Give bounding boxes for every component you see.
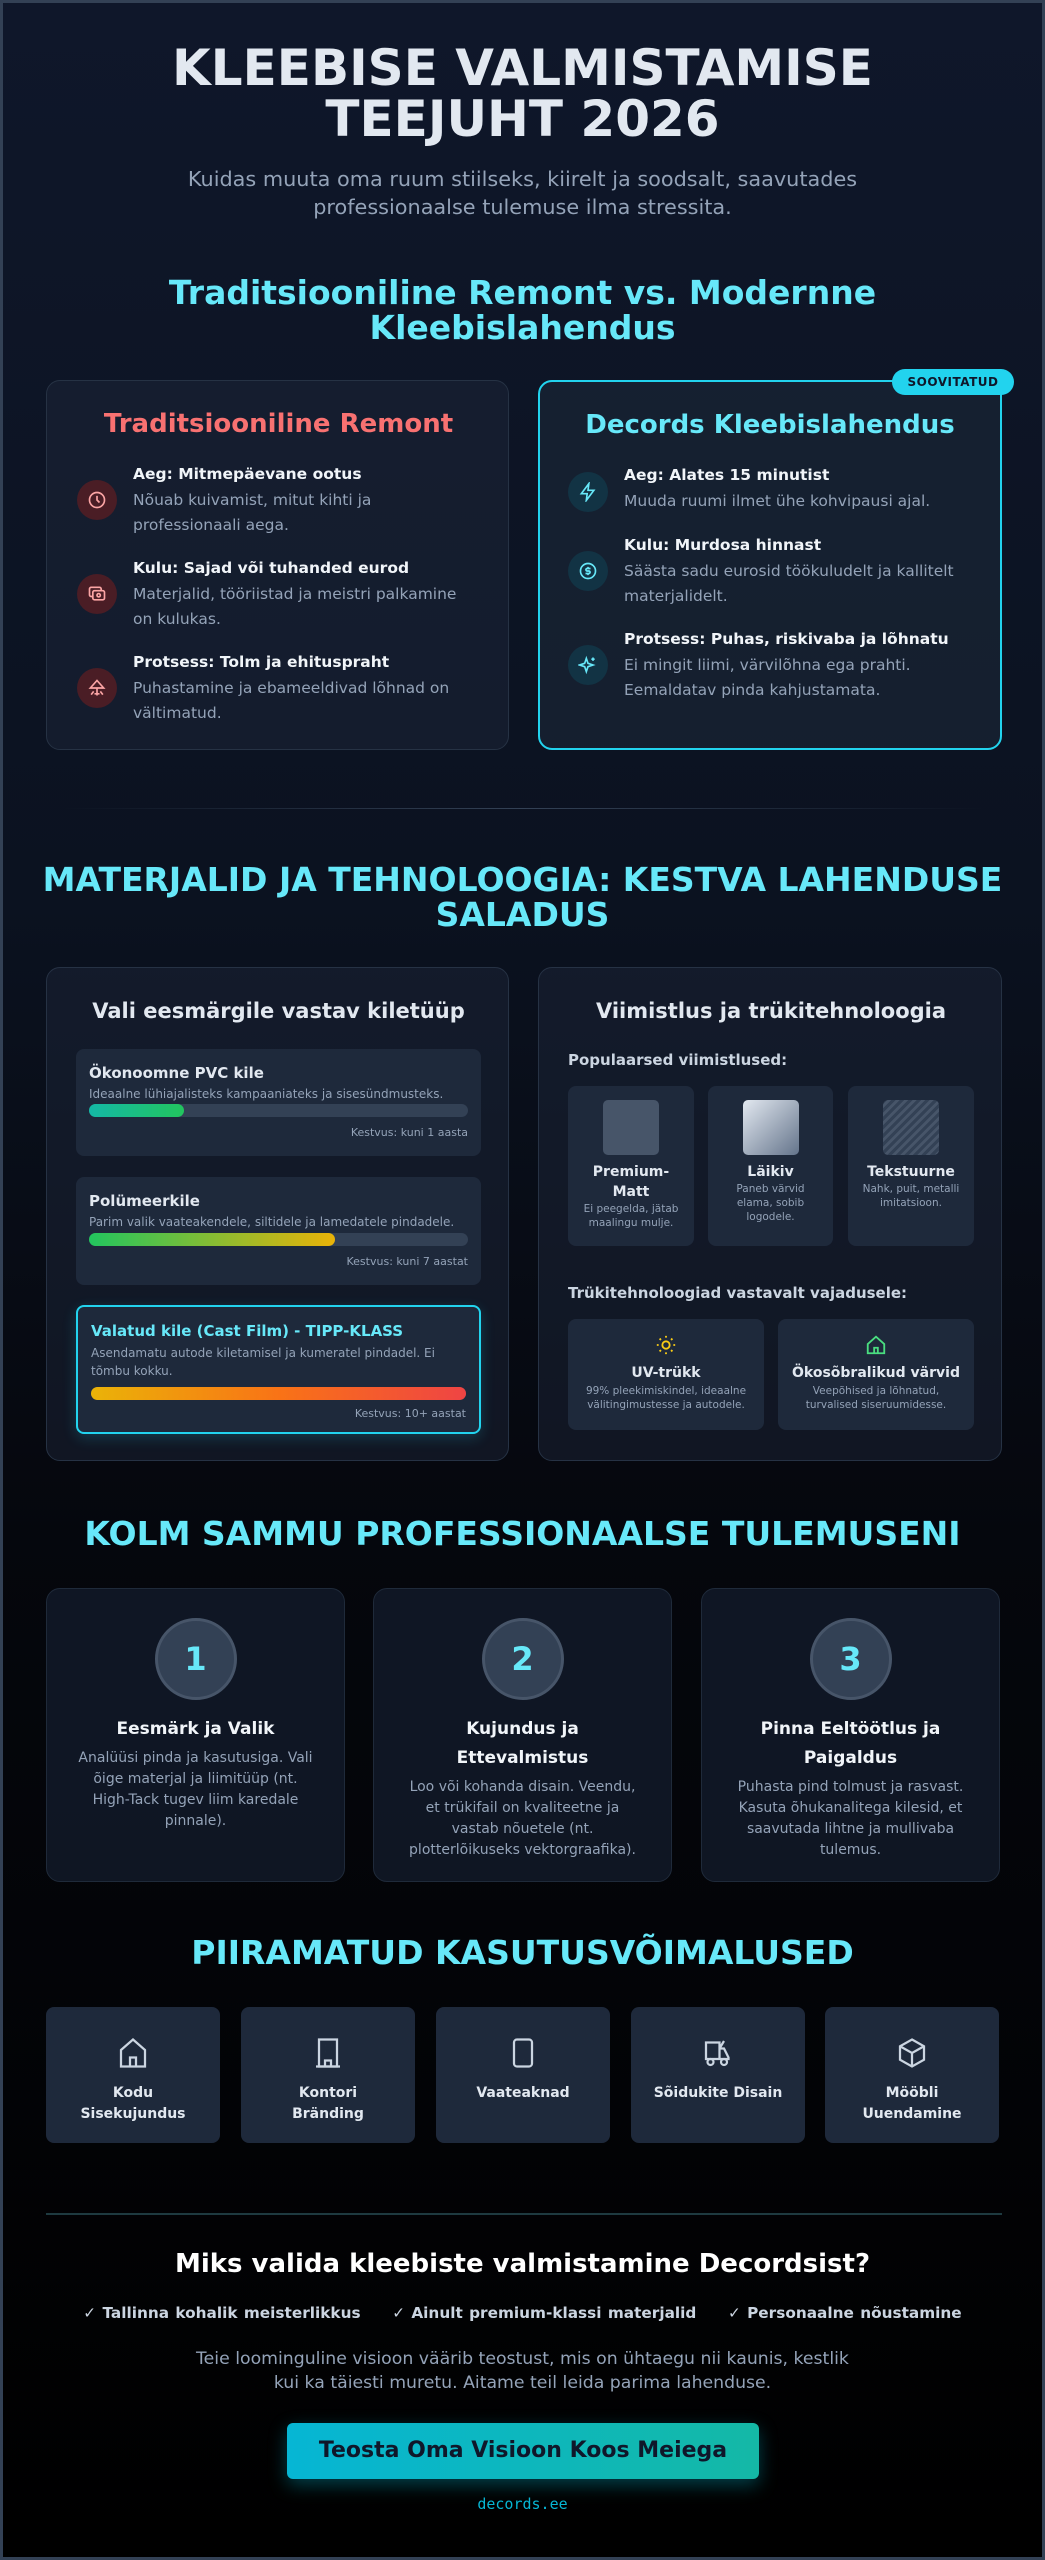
step 2: plotterlõikuseks vektorgraafika). — [409, 1842, 636, 1858]
use: vehicles: Sõidukite Disain — [654, 2085, 782, 2101]
heading: materials: MATERJALID JA TEHNOLOOGIA: KESTVA LAHENDUSE — [43, 860, 1002, 899]
item: process: vältimatud. — [133, 704, 222, 722]
tile: eco inks: turvalised siseruumidesse. — [806, 1399, 946, 1411]
bar: 1 year — [89, 1104, 468, 1117]
item: time: Muuda ruumi ilmet ühe kohvipausi ajal. — [624, 492, 930, 510]
badge: recommended: SOOVITATUD — [908, 375, 998, 389]
link: website: decords.ee — [477, 2495, 568, 2513]
step 2: Loo või kohanda disain. Veendu, — [410, 1779, 635, 1795]
heading: traditional: Traditsiooniline Remont — [104, 409, 453, 439]
panel: finishes & print: Trükitehnoloogiad vastavalt vajadusele: — [568, 1284, 907, 1302]
item: process: Protsess: Puhas, riskivaba ja lõhnatu — [624, 630, 949, 648]
item: process — [77, 653, 449, 722]
paragraph: kui ka täiesti muretu. Aitame teil leida parima lahenduse. — [274, 2373, 771, 2393]
step 2: 2 — [511, 1640, 534, 1678]
item: time: Aeg: Mitmepäevane ootus — [133, 465, 362, 483]
film: PVC: Ökonoomne PVC kile — [89, 1064, 264, 1082]
title: KLEEBISE VALMISTAMISE — [172, 39, 873, 97]
tile: UV: välitingimustesse ja autodele. — [587, 1399, 745, 1411]
icon: coin — [568, 551, 608, 591]
tile: gloss: Läikiv — [747, 1164, 794, 1180]
tile: texture: Tekstuurne — [867, 1164, 955, 1180]
film: polymer: Polümeerkile — [89, 1192, 200, 1210]
film: polymer: Kestvus: kuni 7 aastat — [346, 1255, 468, 1268]
icon: sparkle — [568, 645, 608, 685]
film: cast — [76, 1305, 481, 1434]
item: time: professionaali aega. — [133, 516, 289, 534]
icon: money — [77, 574, 117, 614]
item: cost: on kulukas. — [133, 610, 221, 628]
use: home: Sisekujundus — [80, 2106, 186, 2122]
step 2: Ettevalmistus — [457, 1748, 588, 1768]
button: CTA: Teosta Oma Visioon Koos Meiega — [319, 2438, 727, 2463]
film: PVC: Ideaalne lühiajalisteks kampaaniateks ja sisesündmusteks. — [89, 1087, 443, 1101]
step 3: Paigaldus — [804, 1748, 897, 1768]
tile: UV: UV-trükk — [631, 1365, 701, 1381]
step 1: pinnale). — [165, 1813, 226, 1829]
icon: debris — [77, 668, 117, 708]
subtitle — [188, 167, 857, 219]
heading: Viimistlus ja trükitehnoloogia — [596, 999, 946, 1023]
heading: comparison: Traditsiooniline Remont vs. Modernne — [169, 273, 876, 312]
heading: materials: SALADUS — [436, 895, 609, 934]
item: time — [77, 465, 371, 534]
film: polymer: Parim valik vaateakendele, siltidele ja lamedatele pindadele. — [89, 1215, 454, 1229]
tile: texture — [848, 1086, 974, 1246]
use: home — [46, 2007, 220, 2143]
step 3: tulemus. — [820, 1842, 881, 1858]
tile: texture: imitatsioon. — [880, 1197, 942, 1209]
tile: UV — [568, 1319, 764, 1430]
step 1 — [46, 1588, 345, 1882]
tile: texture: Nahk, puit, metalli — [863, 1183, 959, 1195]
use: windows: Vaateaknad — [476, 2085, 570, 2101]
film: cast: Asendamatu autode kiletamisel ja kumeratel pindadel. Ei tõmbu kokku. — [91, 1346, 435, 1378]
subtitle: Kuidas muuta oma ruum stiilseks, kiirelt ja soodsalt, saavutades — [188, 167, 857, 191]
tile: eco inks: Veepõhised ja lõhnatud, — [813, 1385, 939, 1397]
panel: finishes & print: Populaarsed viimistlused: — [568, 1051, 787, 1069]
item: process: Puhastamine ja ebameeldivad lõhnad on — [133, 679, 449, 697]
icon: lightning — [568, 472, 608, 512]
step 2: vastab nõuetele (nt. — [452, 1821, 593, 1837]
tile: matt: Matt — [613, 1184, 649, 1200]
use: furniture — [825, 2007, 999, 2143]
heading: Vali eesmärgile vastav kiletüüp — [92, 999, 465, 1023]
tile: gloss: Paneb värvid — [736, 1183, 805, 1195]
paragraph — [196, 2349, 849, 2393]
tile: gloss — [708, 1086, 833, 1246]
step 3 — [701, 1588, 1000, 1882]
step 3: saavutada lihtne ja mullivaba — [747, 1821, 954, 1837]
item: cost: Kulu: Murdosa hinnast — [624, 536, 821, 554]
item: cost: Säästa sadu eurosid töökuludelt ja kallitelt — [624, 562, 954, 580]
step 1: 1 — [184, 1640, 207, 1678]
item: process: Protsess: Tolm ja ehituspraht — [133, 653, 389, 671]
use: furniture: Mööbli — [886, 2085, 938, 2101]
icon: clock — [77, 480, 117, 520]
panel: traditional — [46, 380, 509, 750]
icon: sun — [656, 1336, 676, 1354]
tile: matt: maalingu mulje. — [589, 1217, 673, 1229]
step 1: Eesmärk ja Valik — [117, 1719, 274, 1739]
tile: matt — [568, 1086, 694, 1246]
checklist: ✓ Tallinna kohalik meisterlikkus ✓ Ainult premium-klassi materjalid ✓ Personaalne nõustamine — [83, 2304, 962, 2322]
item: cost — [77, 559, 456, 628]
tile: eco inks: Ökosõbralikud värvid — [792, 1365, 960, 1381]
step 1: õige materjal ja liimitüüp (nt. — [93, 1771, 298, 1787]
tile: matt: Ei peegelda, jätab — [584, 1203, 678, 1215]
step 2: et trükifail on kvaliteetne ja — [426, 1800, 619, 1816]
item: time: Aeg: Alates 15 minutist — [624, 466, 829, 484]
heading: materials — [43, 860, 1002, 934]
film: cast: Valatud kile (Cast Film) - TIPP-KLASS — [91, 1322, 403, 1340]
bar: 7 years — [89, 1233, 468, 1246]
use: furniture: Uuendamine — [862, 2106, 962, 2122]
item: time: Nõuab kuivamist, mitut kihti ja — [133, 491, 371, 509]
use: office: Kontori — [299, 2085, 357, 2101]
title: TEEJUHT 2026 — [325, 90, 720, 148]
use: windows — [436, 2007, 610, 2143]
step 3: Kasuta õhukanalitega kilesid, et — [739, 1800, 962, 1816]
badge: recommended — [892, 369, 1014, 395]
step 3: 3 — [839, 1640, 862, 1678]
bar: 10+ years — [91, 1387, 466, 1400]
item: cost — [568, 536, 954, 605]
icon: house — [866, 1336, 886, 1354]
heading: steps: KOLM SAMMU PROFESSIONAALSE TULEMUSENI — [84, 1514, 961, 1553]
heading: uses: PIIRAMATUD KASUTUSVÕIMALUSED — [191, 1933, 854, 1972]
button: CTA — [287, 2423, 759, 2479]
tile: gloss: logodele. — [746, 1211, 795, 1223]
tile: gloss: elama, sobib — [737, 1197, 804, 1209]
tile: UV: 99% pleekimiskindel, ideaalne — [586, 1385, 746, 1397]
step 2 — [373, 1588, 672, 1882]
film: polymer — [76, 1177, 481, 1285]
panel: finishes & print — [538, 967, 1002, 1461]
heading: decords: Decords Kleebislahendus — [585, 410, 955, 440]
tile: eco inks — [778, 1319, 974, 1430]
item: time — [568, 466, 930, 512]
item: process — [568, 630, 949, 699]
use: home: Kodu — [113, 2085, 153, 2101]
panel: film types — [46, 967, 509, 1461]
tile: matt: Premium- — [593, 1164, 669, 1180]
use: office — [241, 2007, 415, 2143]
heading: comparison: Kleebislahendus — [370, 308, 675, 347]
film: PVC: Kestvus: kuni 1 aasta — [351, 1126, 468, 1139]
use: vehicles — [631, 2007, 805, 2143]
item: cost: Kulu: Sajad või tuhanded eurod — [133, 559, 409, 577]
title — [172, 39, 873, 148]
paragraph: Teie loominguline visioon väärib teostust, mis on ühtaegu nii kaunis, kestlik — [196, 2349, 849, 2369]
film: PVC — [76, 1049, 481, 1156]
item: process: Ei mingit liimi, värvilõhna ega prahti. — [624, 656, 911, 674]
subtitle: professionaalse tulemuse ilma stressita. — [313, 195, 732, 219]
step 3: Puhasta pind tolmust ja rasvast. — [738, 1779, 963, 1795]
panel: decords solution — [538, 380, 1002, 750]
use: office: Bränding — [292, 2106, 364, 2122]
item: cost: Materjalid, tööriistad ja meistri palkamine — [133, 585, 456, 603]
step 3: Pinna Eeltöötlus ja — [761, 1719, 940, 1739]
item: process: Eemaldatav pinda kahjustamata. — [624, 681, 880, 699]
heading: comparison — [169, 273, 876, 347]
step 1: High-Tack tugev liim karedale — [93, 1792, 298, 1808]
film: cast: Kestvus: 10+ aastat — [355, 1407, 466, 1420]
heading: why decords: Miks valida kleebiste valmistamine Decordsist? — [175, 2249, 870, 2279]
step 1: Analüüsi pinda ja kasutusiga. Vali — [78, 1750, 313, 1766]
step 2: Kujundus ja — [466, 1719, 579, 1739]
item: cost: materjalidelt. — [624, 587, 728, 605]
